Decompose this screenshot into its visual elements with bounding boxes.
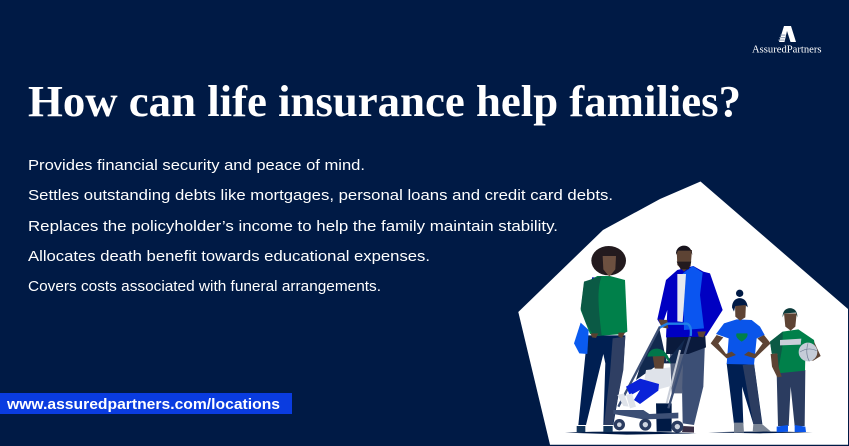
benefit 5: Covers costs associated with funeral arrangements. (28, 278, 381, 295)
stroller with child (613, 324, 691, 433)
title: How can life insurance help families? (28, 77, 741, 126)
white house-shaped panel (518, 182, 848, 445)
website link bar: www.assuredpartners.com/locations (6, 396, 280, 413)
daughter (711, 290, 771, 433)
benefits list (28, 157, 613, 295)
benefit 1: Provides financial security and peace of mind. (28, 157, 365, 174)
illustration: family (565, 246, 821, 435)
ground shadows (565, 431, 813, 435)
logo: AssuredPartners (752, 26, 822, 56)
son with ball (770, 308, 821, 432)
father (656, 246, 723, 433)
benefit 4: Allocates death benefit towards educational expenses. (28, 248, 430, 265)
mother (574, 246, 627, 432)
benefit 2: Settles outstanding debts like mortgages, personal loans and credit card debts. (28, 187, 613, 204)
logo: AssuredPartners: AssuredPartners (752, 44, 822, 56)
benefit 3: Replaces the policyholder’s income to help the family maintain stability. (28, 218, 558, 235)
